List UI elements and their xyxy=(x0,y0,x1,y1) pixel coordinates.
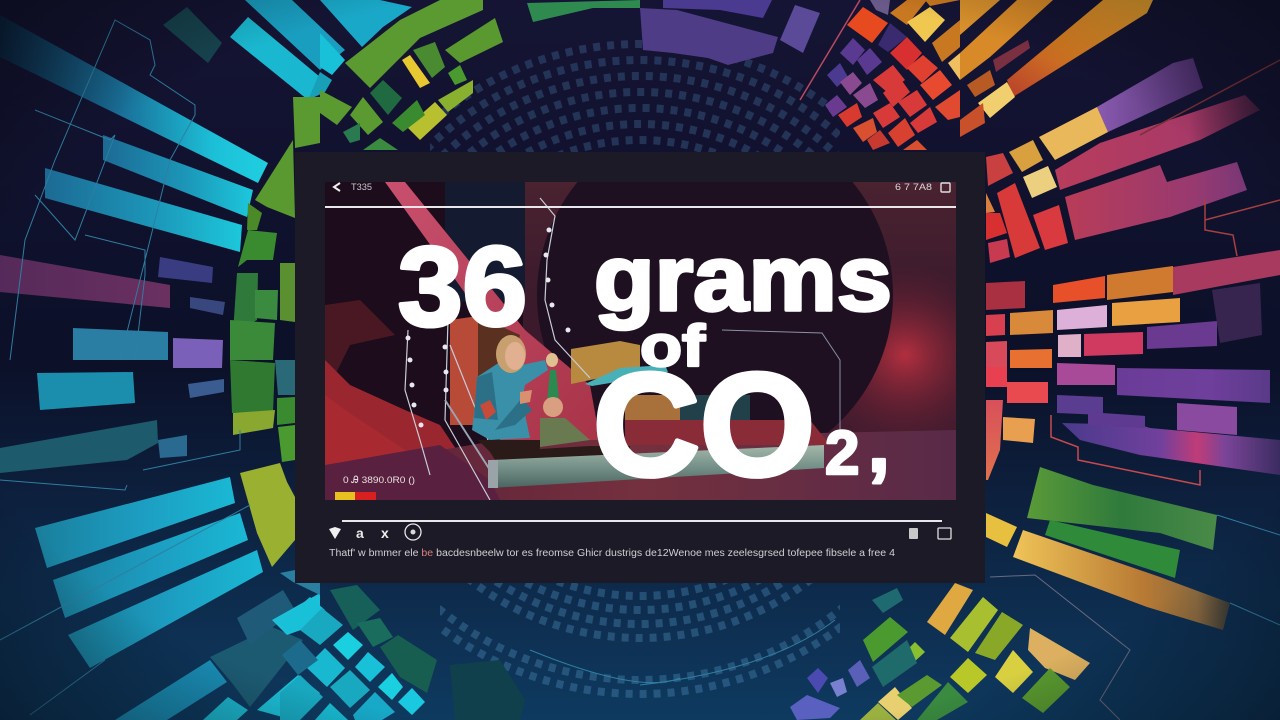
right background panel xyxy=(523,182,956,433)
yellow tag xyxy=(335,492,355,500)
left sky tint xyxy=(445,182,525,302)
floor band xyxy=(446,430,956,500)
left red hills xyxy=(325,300,395,375)
list icon xyxy=(938,528,951,539)
cyan block cluster: lower left xyxy=(280,585,525,720)
dark circular planet xyxy=(537,182,893,438)
roller xyxy=(491,445,824,488)
left bars: cyan and blue xyxy=(0,0,412,720)
back chevron xyxy=(334,183,340,191)
lower right bars: green and yellow xyxy=(790,467,1230,720)
character: person in blue jacket xyxy=(472,335,590,452)
top right label: 6 7 7A8 xyxy=(895,182,932,192)
upper left ring: green and yellow blocks xyxy=(320,0,640,150)
headline: subscript 2: 2 xyxy=(825,419,859,488)
caption icon xyxy=(909,528,918,539)
headline text xyxy=(398,224,892,506)
right bars: orange, pink and purple xyxy=(960,0,1280,485)
top ring: purple blocks xyxy=(640,0,820,65)
x icon: x xyxy=(381,525,389,541)
left ring: green and lime blocks xyxy=(230,97,320,567)
a icon: a xyxy=(356,525,364,541)
brown doorway xyxy=(478,322,520,376)
caption text: Thatf' w bmmer ele be bacdesnbeelw tor es freomse Ghicr dustrigs de12Wenoe mes zeelesgrsed tofepee fibsele a free 4 xyxy=(329,548,895,559)
video illustration xyxy=(325,182,956,500)
header rule xyxy=(325,206,956,208)
frame strut xyxy=(445,400,490,470)
platform bed xyxy=(490,446,630,460)
orange wall xyxy=(450,316,478,425)
video player panel xyxy=(295,117,1000,583)
red tag xyxy=(355,492,376,500)
controls: left icons xyxy=(329,524,421,541)
top right icon xyxy=(941,183,950,192)
beads xyxy=(406,228,570,428)
headline: grams: grams xyxy=(594,226,892,330)
scrubber timeline xyxy=(342,520,942,522)
outlined device xyxy=(722,330,840,432)
headline: CO: CO xyxy=(593,343,815,506)
panel background xyxy=(295,152,985,583)
circled play icon xyxy=(405,524,421,540)
bead strands xyxy=(405,198,590,500)
headline: of: of xyxy=(640,314,706,379)
pink diagonal band xyxy=(385,182,600,440)
controls: right icons xyxy=(909,528,951,539)
heart icon xyxy=(329,527,341,539)
scene behind letters xyxy=(625,395,680,420)
headline: 36: 36 xyxy=(398,224,527,349)
dotted glyph rings: bottom xyxy=(440,583,840,698)
red glow on right xyxy=(851,279,956,430)
dotted glyph rings: top xyxy=(430,40,840,152)
wooden box xyxy=(571,341,640,384)
scene label: 0 Ꭿ 3890.0R0 () xyxy=(343,475,415,486)
teal roof xyxy=(585,365,668,386)
headline: comma: , xyxy=(868,400,890,488)
top left label: T335 xyxy=(351,182,372,192)
roller metal cap xyxy=(488,460,498,488)
upper right ring: red and orange blocks xyxy=(800,0,960,150)
